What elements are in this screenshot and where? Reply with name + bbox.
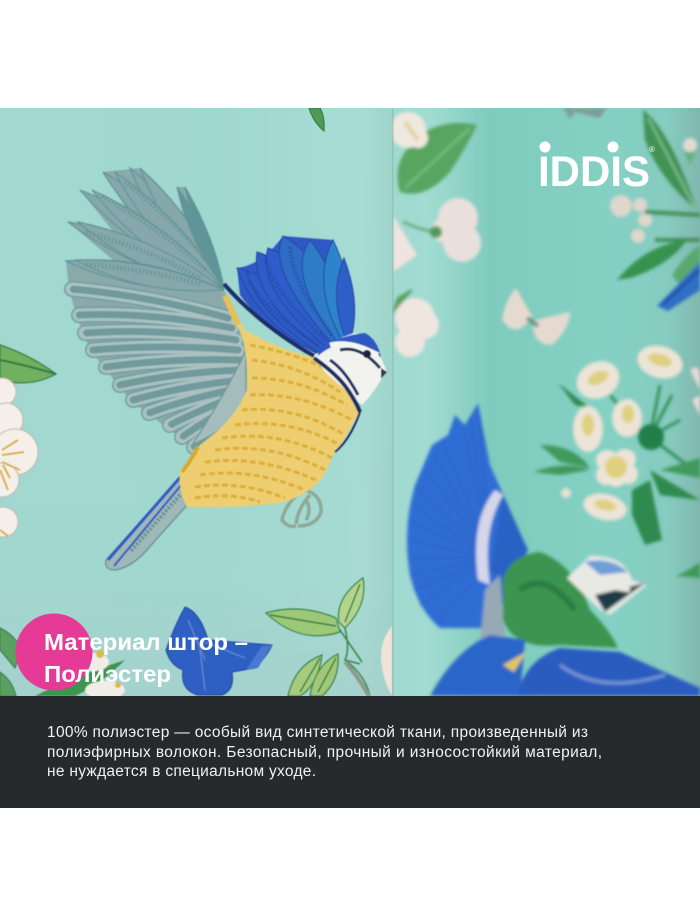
pale butterfly [502, 288, 570, 345]
title text: Материал штор – [44, 629, 248, 655]
left curtain panel [0, 108, 392, 699]
flying blue tit bird [66, 168, 387, 570]
dark neck stripe [224, 284, 314, 356]
dark description panel [0, 696, 700, 808]
title text [44, 629, 248, 687]
IDDIS logo: ® [649, 145, 655, 154]
feet [258, 490, 321, 526]
small leaf at top of left panel [309, 108, 324, 131]
top right leaves and flowers [563, 108, 700, 311]
gray wing [66, 168, 246, 447]
head [314, 333, 387, 452]
yellow body [180, 288, 360, 507]
leaf and white flowers on left edge [0, 345, 56, 537]
description text: 100% полиэстер — особый вид синтетической ткани, произведенный из [47, 724, 588, 741]
blue butterfly at bottom [166, 607, 272, 695]
title text: Полиэстер [44, 661, 171, 687]
green branch with leaves [266, 578, 370, 696]
IDDIS logo: IDDIS [538, 148, 650, 196]
title with pink circle [16, 614, 248, 690]
infographic canvas [0, 108, 700, 808]
blurred blue tit bird [407, 403, 700, 696]
blue crest feathers [237, 236, 355, 356]
description text: не нуждается в специальном уходе. [47, 763, 316, 780]
description text [47, 724, 602, 780]
pale flower at right edge of left panel [381, 626, 392, 695]
tail [106, 470, 187, 570]
description text: полиэфирных волокон. Безопасный, прочный и износостойкий материал, [47, 744, 602, 761]
pink circle [16, 614, 92, 690]
white blossom cluster [533, 341, 700, 578]
flowers and leaf upper left of right panel [390, 112, 481, 357]
right curtain panel [390, 108, 700, 696]
flower and leaves at bottom left [0, 628, 125, 699]
fold shadow on left edge of right panel [392, 108, 394, 696]
